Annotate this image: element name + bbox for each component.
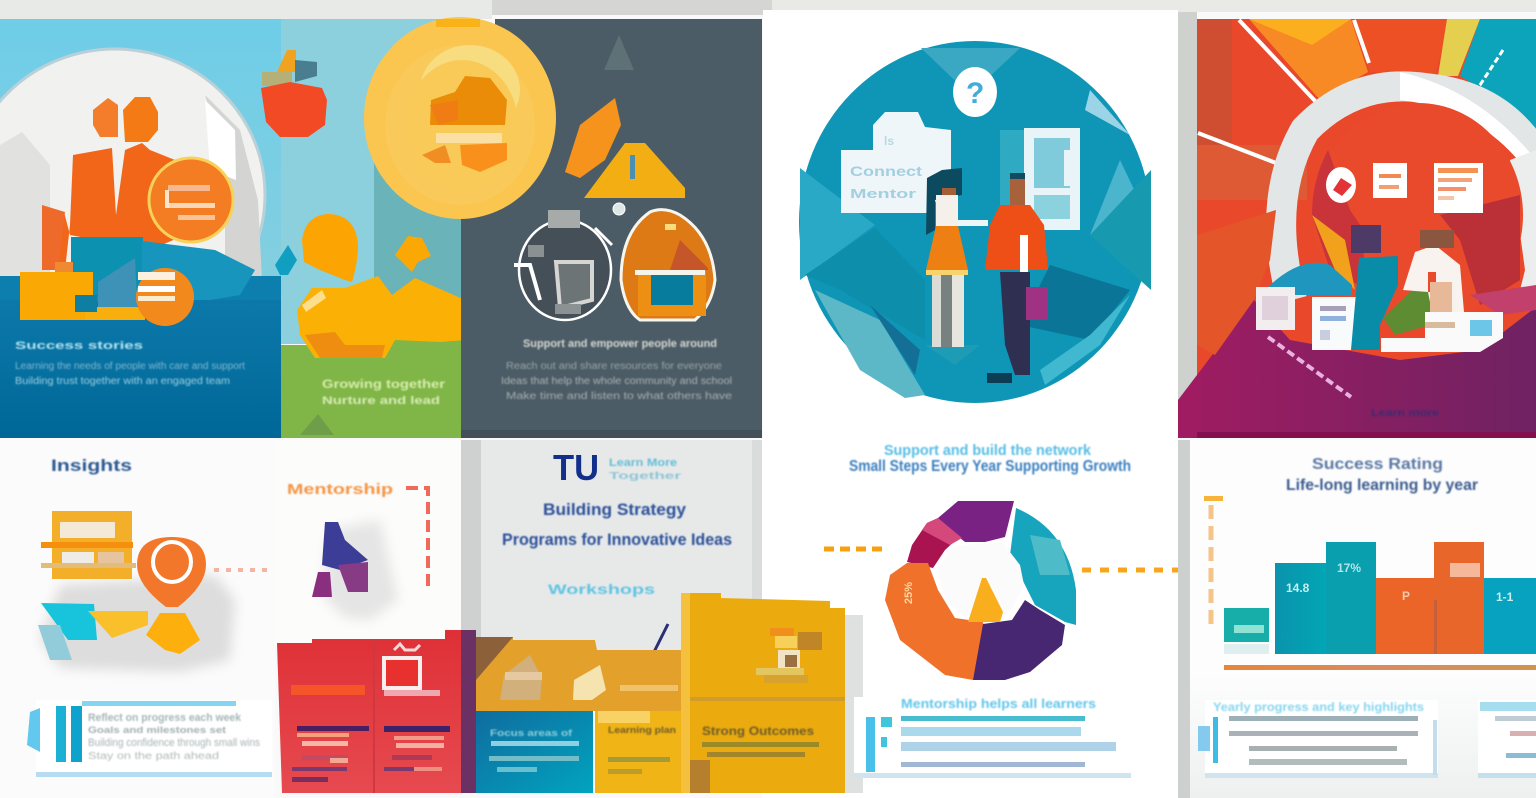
icon: orange backpack [621,210,715,320]
label: orange [291,685,365,695]
text block: blue panel copy [15,340,245,387]
person: woman [926,168,988,347]
text block: green panel copy: Growing together [322,377,445,391]
gray shadow [40,575,235,672]
white dome backdrop [0,49,281,438]
heading: two lines: Programs for Innovative Ideas [502,530,732,549]
logo caption: Together [609,471,681,482]
dashed red connector [406,488,428,590]
facets of circle [800,48,1151,398]
text block: blue panel copy: Learning the needs of people with care and support [15,361,245,372]
values on orange: 25% [903,582,915,604]
panel: blue text box [476,711,593,793]
section: donut chart title: Support and build the network [884,442,1092,459]
text block: blue panel copy: Success stories [15,340,143,352]
purple segment [938,501,1014,542]
icon: white outlined cup [514,203,625,320]
panel: insights list [0,438,275,798]
text block: slate panel copy: Make time and listen to what others have [506,391,733,402]
bar chart [1224,542,1536,670]
text block: card copy: Goals and milestones set [88,725,226,735]
white hole [938,543,1024,622]
icon: yellow balloons and cloud [297,214,466,358]
dashed connector left [824,546,886,552]
column: left list [292,726,369,782]
dashed connector right [1082,568,1194,572]
icon: orange emblem in sun [422,76,507,172]
icon: orange leaf [565,98,621,178]
icon: warning triangle [584,143,685,198]
bubble: speech cloud [841,112,951,213]
person: man [985,173,1048,383]
card: left note [27,700,272,777]
logo caption [609,457,681,482]
board: document panel [1024,128,1080,230]
panel: large yellow card [681,593,863,793]
icon: shelf [41,511,136,579]
yellow band [1438,19,1480,76]
shadow blob [322,520,398,620]
icon: dotted connector [214,568,272,572]
bar chart: 17% [1337,561,1361,575]
white ring [1281,86,1536,300]
orange segment [885,563,985,680]
column: right list [384,726,450,771]
teal wedge [1460,19,1536,138]
purple floor [1178,300,1536,438]
person: orange figure [42,97,185,270]
text block: yellow card copy: Strong Outcomes [702,724,814,738]
text: small caption on purple: Learn more [1371,408,1440,419]
text block: slate panel copy [501,338,733,402]
dark purple segment [973,600,1065,680]
text block: green panel copy [322,377,445,407]
bubble: question mark: ? [966,77,984,110]
logo text: TU [553,447,599,488]
text block: card copy [88,712,260,762]
heading: two lines [502,500,732,549]
icon: tan figures [500,655,678,700]
subheading: cyan: Workshops [548,581,655,597]
crimson segment [907,518,958,568]
bubble: speech cloud: ls [884,134,894,148]
folder: yellow case [20,262,194,326]
text block: green panel copy: Nurture and lead [322,395,440,407]
icon: small list card [1373,163,1407,198]
icon: white tv [384,644,440,696]
dashed vertical axis [1204,496,1223,625]
bar chart: 1-1 [1496,590,1514,604]
heading: two lines: Building Strategy [543,500,687,519]
card: bar note one [1198,700,1438,778]
text block: card copy: Stay on the path ahead [88,751,219,762]
icon: golden sun circle [364,17,556,219]
badge: orange circle with list [149,158,233,242]
inner red disc [1419,103,1523,239]
panel: bar chart section [1178,440,1536,798]
bubble: speech cloud: Connect [850,163,922,179]
section: donut chart title [849,442,1131,475]
baseline [1224,665,1536,670]
icon: small pie card [1326,167,1356,203]
text block: card copy: Building confidence through small wins [88,737,260,749]
heading: Life-long learning by year [1286,477,1478,494]
text block: card copy: Reflect on progress each week [88,712,242,724]
white dashed rays [1198,20,1369,163]
text block: slate panel copy: Ideas that help the whole community and school [501,376,732,387]
bar chart: P [1402,589,1410,603]
panel: blue text box: Focus areas of [490,728,573,738]
panel: white donut backdrop [762,438,1178,798]
section: donut chart title: Small Steps Every Year Supporting Growth [849,458,1131,475]
group: people at table [1256,225,1503,352]
heading: Insights [51,456,132,475]
icon: brown cup [756,628,822,683]
panel: gray title card [461,440,762,655]
card: donut note [854,696,1131,778]
panel: white figure card [275,440,462,645]
icon: large list card [1434,163,1483,213]
icon: pen [654,624,668,652]
orange fan triangle [1249,19,1368,100]
bubble: speech cloud: Mentor [850,186,916,201]
panel: gold feature strip [476,637,681,711]
bubble: question mark [953,67,997,117]
panel: yellow text box: Learning plan [608,725,676,735]
icon: purple figure [312,522,368,597]
panel: red info card [277,630,476,793]
panel: dark slate scene [461,19,762,438]
panel: red and purple scene [1178,12,1536,438]
heading [1286,456,1478,494]
panel: people circle [763,10,1178,438]
yellow pointer [968,578,1003,622]
text block: donut copy: Mentorship helps all learners [901,696,1096,711]
panel: yellow text box [595,711,681,793]
icon: diamond connector [275,245,297,275]
text block: blue panel copy: Building trust together with an engaged team [15,376,230,387]
text block: slate panel copy: Support and empower people around [523,338,717,350]
icon: cyan shards [38,603,200,660]
panel: sky and blue scene [0,19,281,438]
chart: donut [885,501,1076,680]
text block: card copy: Yearly progress and key highlights [1213,700,1424,714]
teal segment [1010,508,1076,625]
bar chart: 14.8 [1286,581,1310,595]
laptop: teal device [71,237,255,307]
panel: green middle scene [275,19,470,438]
logo caption: Learn More [609,457,677,469]
heading: Success Rating [1312,456,1443,473]
card: bar note two [1478,700,1536,778]
icon: map pin [137,537,206,607]
icon: red fruit with leaves [261,50,327,137]
heading: orange: Mentorship [287,481,393,498]
text block: slate panel copy: Reach out and share resources for everyone [506,361,722,372]
